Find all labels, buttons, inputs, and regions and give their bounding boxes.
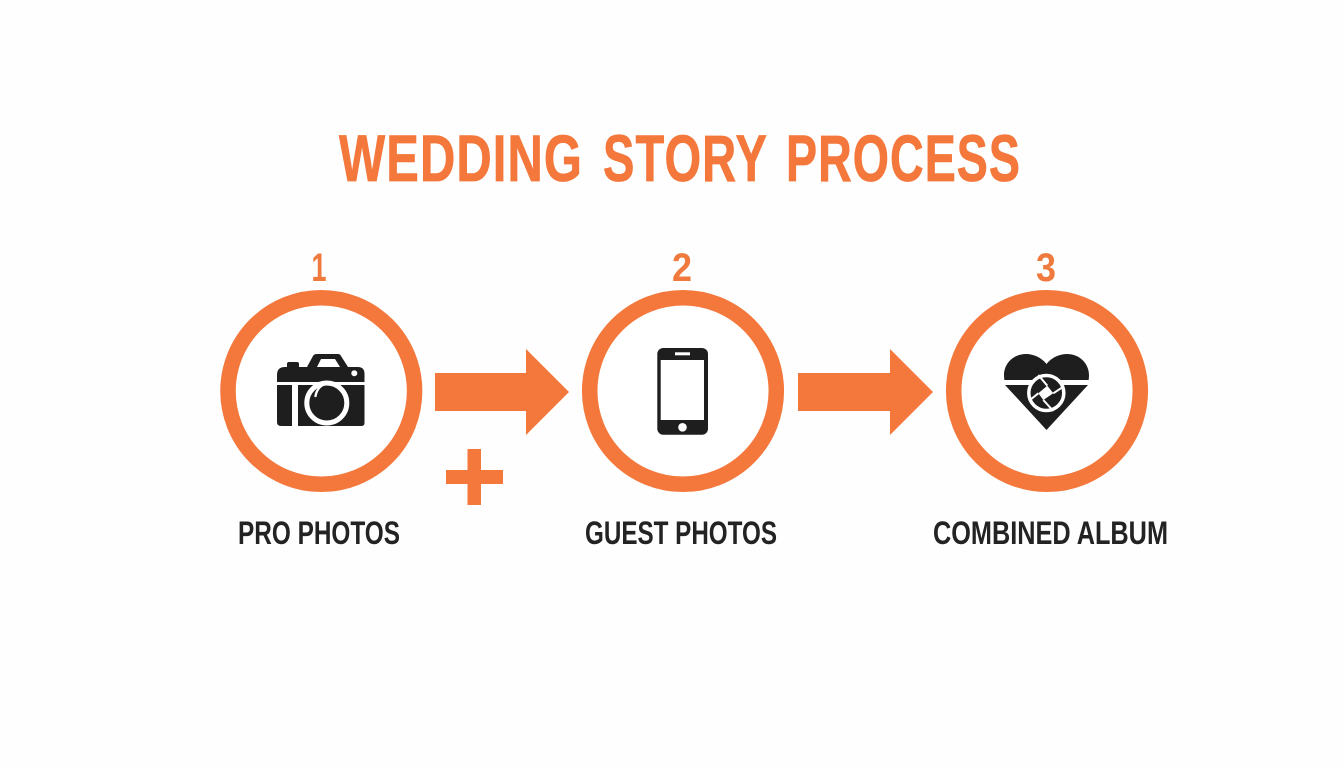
label: pro photos: PRO PHOTOS [238,515,400,551]
arrow: step 2 to step 3 [798,349,933,435]
title: PROCESS [786,121,1021,195]
icon: plus sign [446,449,503,505]
panel: step 1 pro photos [228,246,415,551]
title: WEDDING [339,121,583,195]
label: combined album: COMBINED ALBUM [933,515,1168,551]
step 1 circle [228,298,415,484]
step number 1: 1 [312,246,326,290]
panel: step 2 guest photos [585,246,777,551]
arrow: step 1 to step 2 [435,349,569,435]
step 2 circle [590,298,776,484]
icon: heart with camera aperture [1000,354,1093,430]
icon: camera [277,354,364,426]
title [339,121,1021,195]
step 3 circle [954,298,1140,484]
icon: smartphone [657,348,708,435]
title: STORY [603,121,768,195]
step number 2: 2 [672,246,692,290]
label: guest photos: GUEST PHOTOS [585,515,777,551]
panel: step 3 combined album [933,246,1168,551]
step number 3: 3 [1036,246,1056,290]
